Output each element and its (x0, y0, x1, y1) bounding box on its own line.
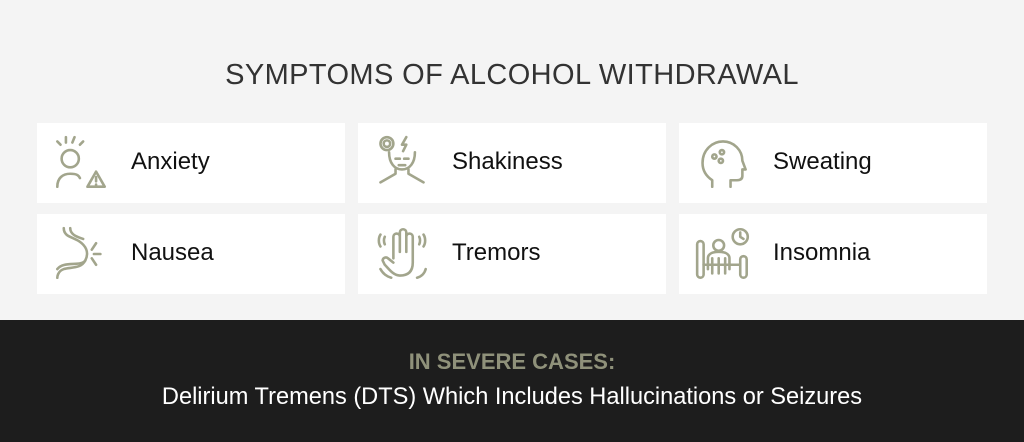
label: Nausea (131, 239, 214, 266)
card: nausea (37, 214, 345, 294)
icon: anxious person (56, 136, 106, 188)
card: tremors (358, 214, 666, 294)
icon: stomach (56, 226, 102, 279)
text: Delirium Tremens (DTS) Which Includes Hallucinations or Seizures (162, 384, 862, 410)
card: anxiety (37, 123, 345, 203)
icon: shaking hand (378, 228, 427, 279)
title: SYMPTOMS OF ALCOHOL WITHDRAWAL (225, 59, 799, 91)
icon: head sweat (701, 140, 747, 188)
icon: head with pain (379, 136, 425, 184)
label: Tremors (452, 239, 540, 266)
card: shakiness (358, 123, 666, 203)
label: Sweating (773, 148, 872, 175)
heading: IN SEVERE CASES: (409, 349, 615, 374)
icon: bed with clock (696, 228, 750, 279)
label: Anxiety (131, 148, 210, 175)
label: Insomnia (773, 239, 870, 266)
card: sweating (679, 123, 987, 203)
label: Shakiness (452, 148, 563, 175)
footer panel: severe cases (0, 320, 1024, 442)
card: insomnia (679, 214, 987, 294)
